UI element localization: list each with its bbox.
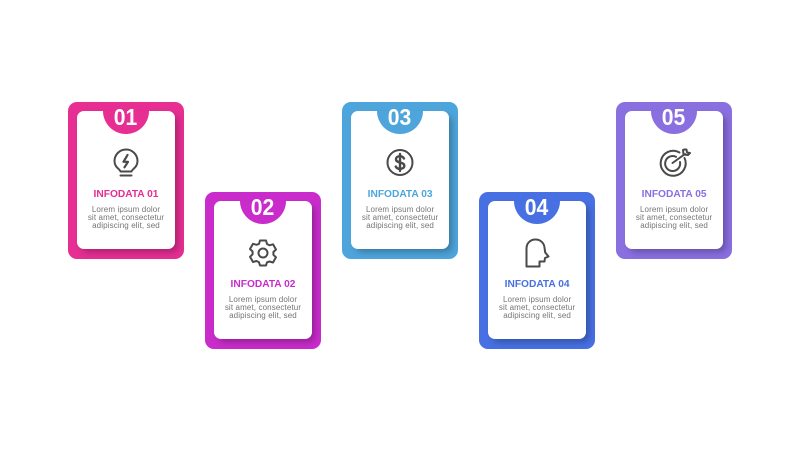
heading 05: INFODATA 05: [642, 189, 707, 200]
white card 03: [351, 111, 449, 249]
white card 02: [214, 201, 312, 339]
white card 01: [77, 111, 175, 249]
panel: infodata 05: [616, 102, 732, 259]
body text 04: [499, 295, 576, 320]
body text 01: [88, 205, 164, 230]
panel: infodata 01: [68, 102, 184, 259]
number badge 04: [514, 201, 560, 224]
white card 04: [488, 201, 586, 339]
number 04: 04: [525, 194, 549, 220]
body text 05: [636, 205, 712, 230]
body text 02: adipiscing elit, sed: [229, 311, 297, 320]
number badge 01: [103, 111, 149, 134]
panel: infodata 02: [205, 192, 321, 349]
white card 05: [625, 111, 723, 249]
body text 03: sit amet, consectetur: [362, 213, 438, 222]
body text 02: Lorem ipsum dolor: [229, 295, 297, 304]
heading 02: INFODATA 02: [231, 279, 295, 290]
icon: head profile: [526, 238, 550, 268]
number 01: 01: [114, 104, 138, 130]
number badge 05: [651, 111, 697, 134]
number 03: 03: [388, 104, 412, 130]
icon: light bulb with bolt: [114, 148, 138, 176]
heading 01: INFODATA 01: [94, 189, 158, 200]
body text 01: Lorem ipsum dolor: [92, 205, 160, 214]
body text 03: adipiscing elit, sed: [366, 221, 434, 230]
body text 01: sit amet, consectetur: [88, 213, 164, 222]
panel: infodata 04: [479, 192, 595, 349]
number badge 02: [240, 201, 286, 224]
body text 05: adipiscing elit, sed: [640, 221, 708, 230]
body text 05: sit amet, consectetur: [636, 213, 712, 222]
body text 04: sit amet, consectetur: [499, 303, 575, 312]
body text 05: Lorem ipsum dolor: [640, 205, 708, 214]
heading 04: INFODATA 04: [505, 279, 570, 290]
body text 04: adipiscing elit, sed: [503, 311, 571, 320]
body text 01: adipiscing elit, sed: [92, 221, 160, 230]
icon: dollar coin: [386, 149, 414, 176]
number badge 03: [377, 111, 423, 134]
number 05: 05: [662, 104, 686, 130]
heading 03: INFODATA 03: [368, 189, 433, 200]
number 02: 02: [251, 194, 275, 220]
body text 04: Lorem ipsum dolor: [503, 295, 571, 304]
body text 02: [225, 295, 301, 320]
icon: gear: [249, 240, 277, 266]
body text 02: sit amet, consectetur: [225, 303, 301, 312]
body text 03: [362, 205, 438, 230]
body text 03: Lorem ipsum dolor: [366, 205, 434, 214]
panel: infodata 03: [342, 102, 458, 259]
icon: target with arrow: [660, 148, 691, 177]
